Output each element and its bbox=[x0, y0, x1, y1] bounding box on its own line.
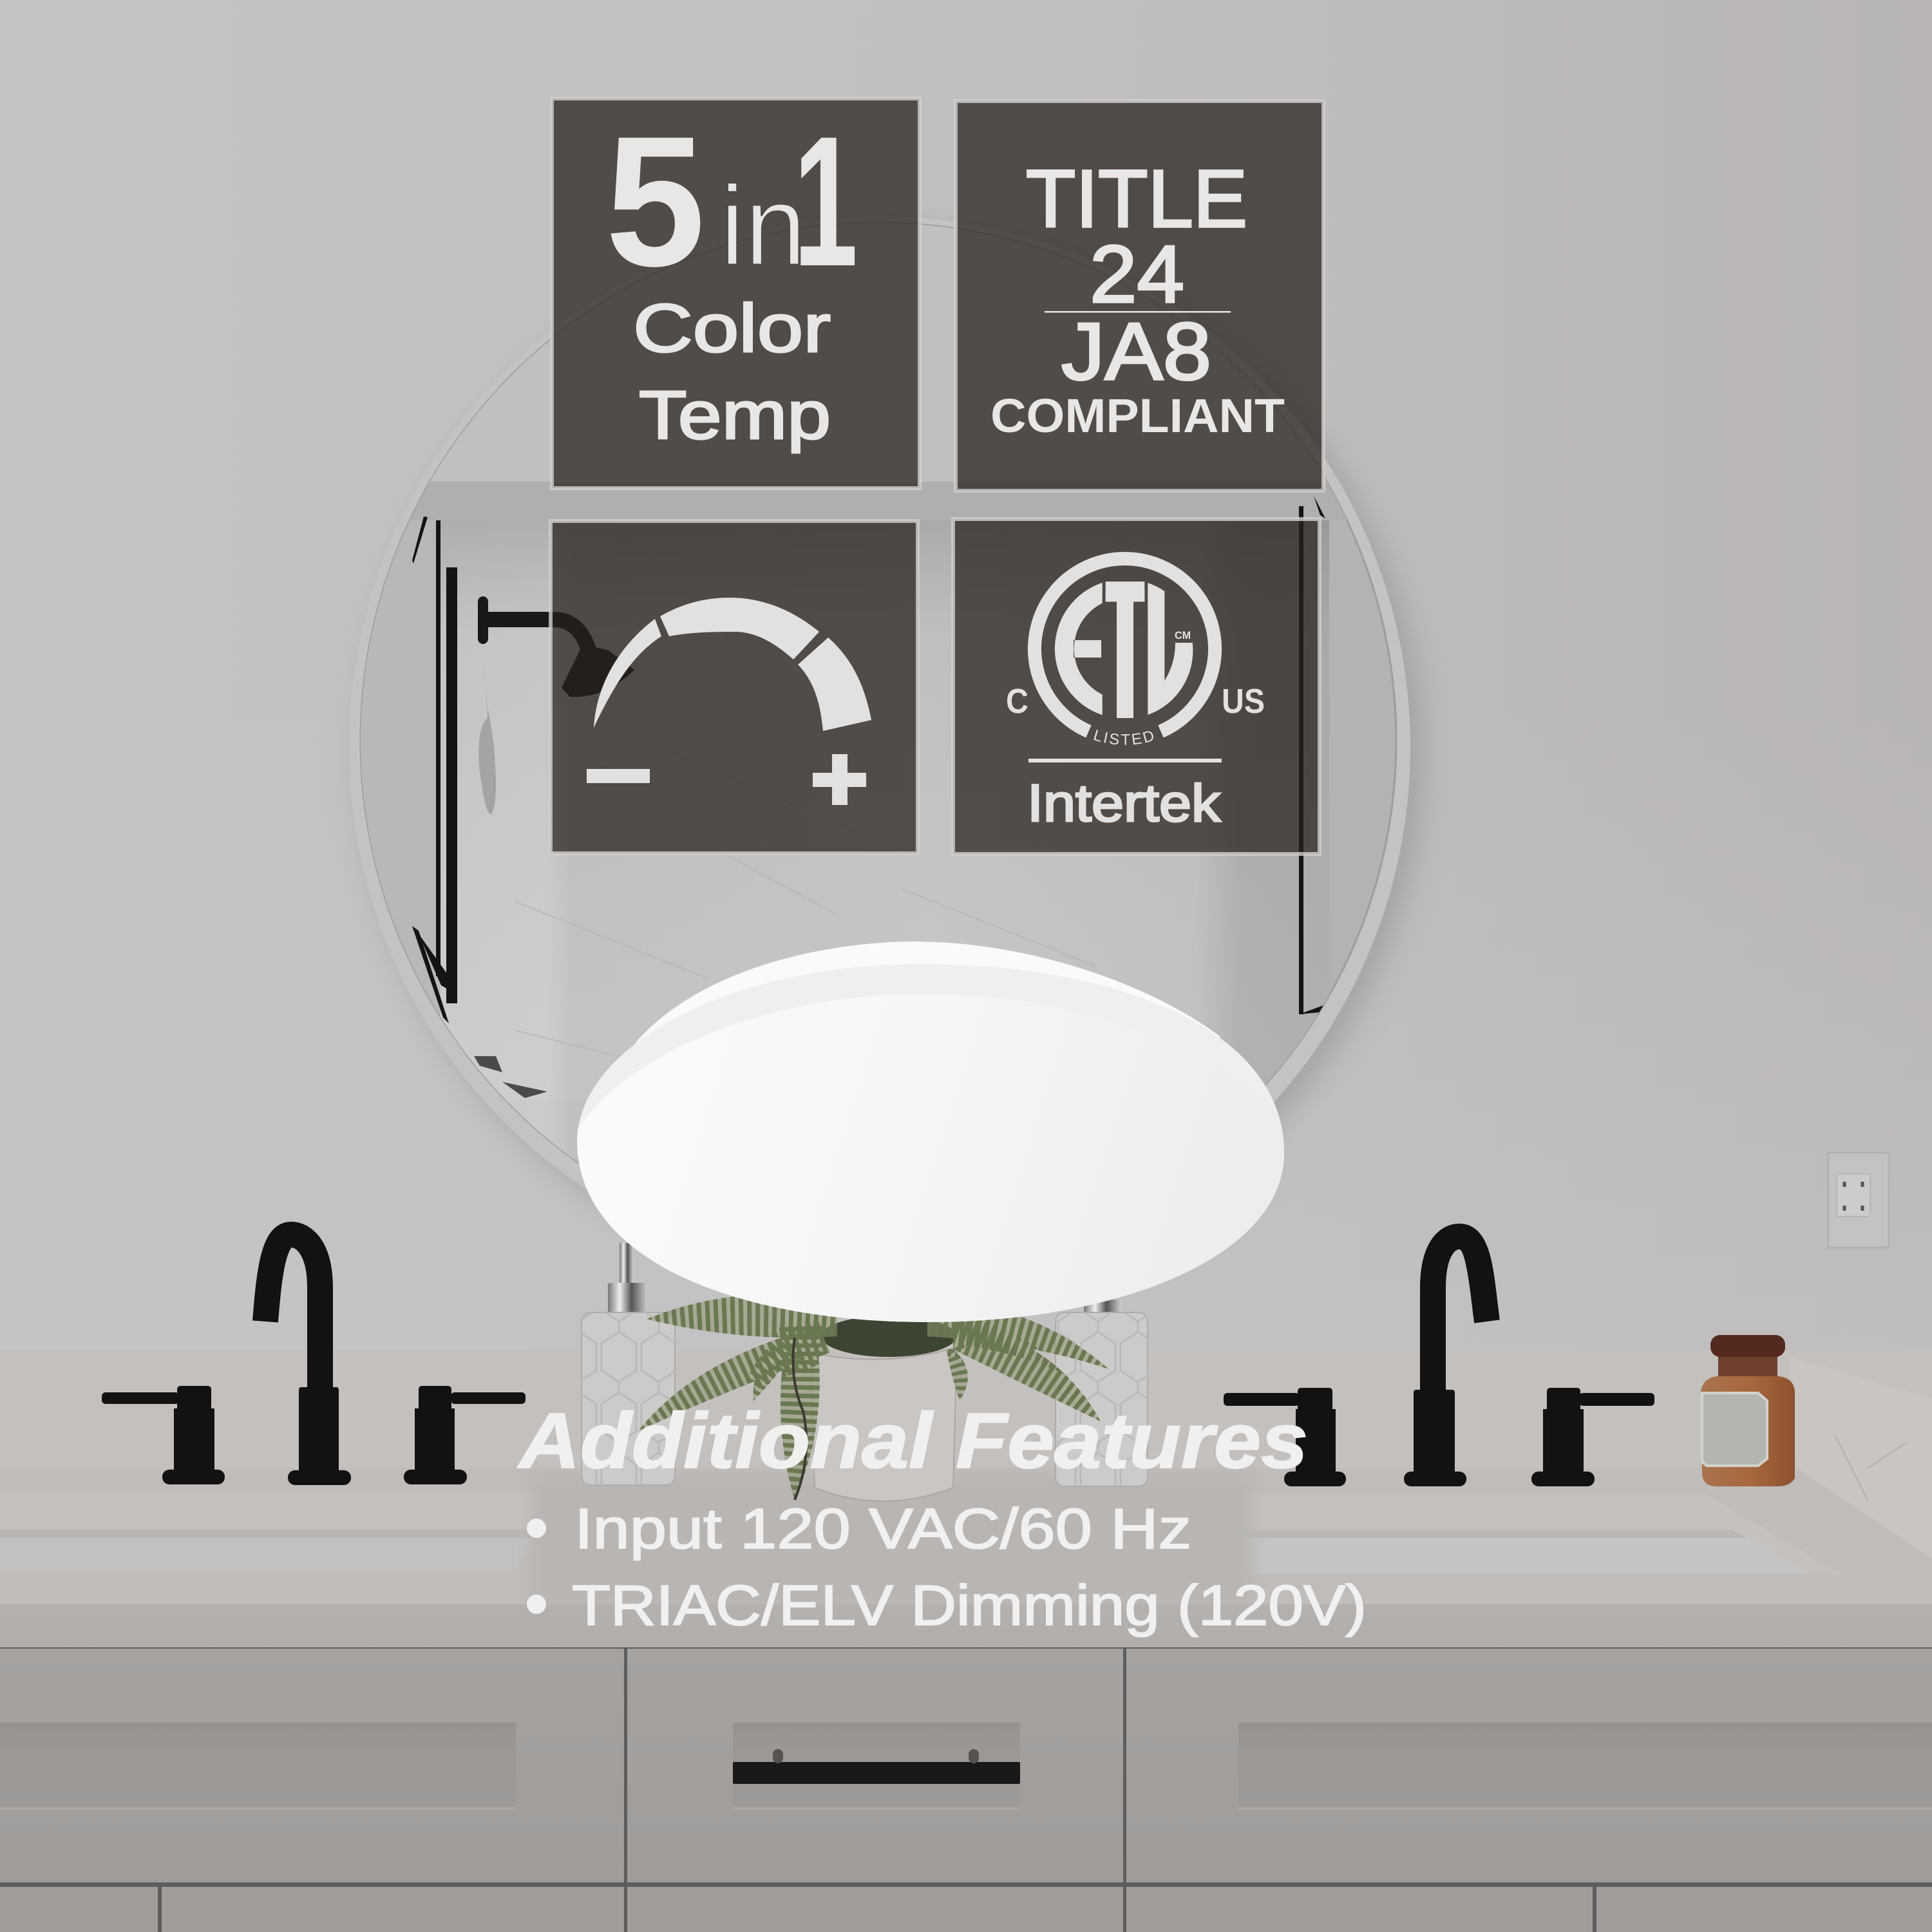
reflected shower head bbox=[478, 596, 634, 815]
text: TITLE 24 bbox=[1026, 153, 1247, 319]
heading: Additional Features: Additional Features bbox=[517, 1397, 1308, 1484]
text: Color Temp: Temp bbox=[639, 377, 831, 453]
text: JA8 COMPLIANT: COMPLIANT bbox=[990, 389, 1285, 442]
divider line bbox=[1045, 311, 1231, 313]
ETL letters bbox=[1055, 582, 1193, 718]
wall outlet bbox=[1828, 1153, 1889, 1247]
right faucet bbox=[1224, 1236, 1654, 1486]
text: TITLE 24: 24 bbox=[1090, 229, 1184, 319]
left faucet bbox=[102, 1235, 526, 1485]
text: JA8 COMPLIANT: JA8 bbox=[1061, 306, 1211, 397]
text: JA8 COMPLIANT bbox=[990, 306, 1285, 442]
bullet: dimming: TRIAC/ELV Dimming (120V) bbox=[572, 1573, 1367, 1637]
soap dispensers bbox=[582, 1243, 1148, 1486]
mirror bbox=[359, 222, 1430, 1207]
heading: 5 in 1: in bbox=[720, 163, 806, 289]
logo small text bbox=[1006, 629, 1265, 745]
panel: ETL listed bbox=[951, 517, 1321, 856]
text: Intertek: Intertek bbox=[1027, 774, 1221, 833]
backsplash and countertop bbox=[0, 1350, 1932, 1647]
cabinet drawer handle bbox=[733, 1749, 1020, 1784]
cabinets bbox=[0, 1647, 1932, 1932]
heading: 5 in 1 bbox=[605, 98, 858, 305]
panel: dimmable bbox=[551, 521, 918, 853]
heading: 5 in 1: 1 bbox=[793, 98, 858, 305]
background wall bbox=[0, 0, 1932, 1365]
bullet: input voltage: Input 120 VAC/60 Hz bbox=[574, 1497, 1191, 1560]
icon: ETL logo ring bbox=[1035, 558, 1215, 732]
logo small text: CM bbox=[1175, 629, 1191, 641]
text: Color Temp: Color bbox=[633, 290, 831, 366]
panel: 5 in 1 color temp bbox=[552, 98, 920, 488]
amber jar bbox=[1701, 1335, 1795, 1486]
panel: Title 24 JA8 compliant bbox=[956, 101, 1323, 491]
divider line bbox=[1028, 759, 1222, 762]
logo small text: US bbox=[1222, 682, 1265, 721]
logo small text: C bbox=[1006, 682, 1028, 721]
shower lines bbox=[412, 496, 1325, 1098]
panel: ETL listed: ETL bbox=[1056, 553, 1193, 753]
fern plant in white pot bbox=[638, 1296, 1109, 1502]
heading: 5 in 1: 5 bbox=[605, 98, 705, 305]
text: Color Temp bbox=[633, 290, 831, 453]
product: round LED ceiling light bbox=[567, 942, 1288, 1333]
icon: plus bbox=[813, 754, 866, 805]
icon: minus bbox=[587, 769, 650, 783]
logo small text: LISTED bbox=[1094, 730, 1153, 745]
text: TITLE 24: TITLE bbox=[1026, 153, 1247, 244]
feature list bbox=[527, 1497, 1367, 1637]
icon: dimmer gauge bbox=[594, 598, 871, 731]
